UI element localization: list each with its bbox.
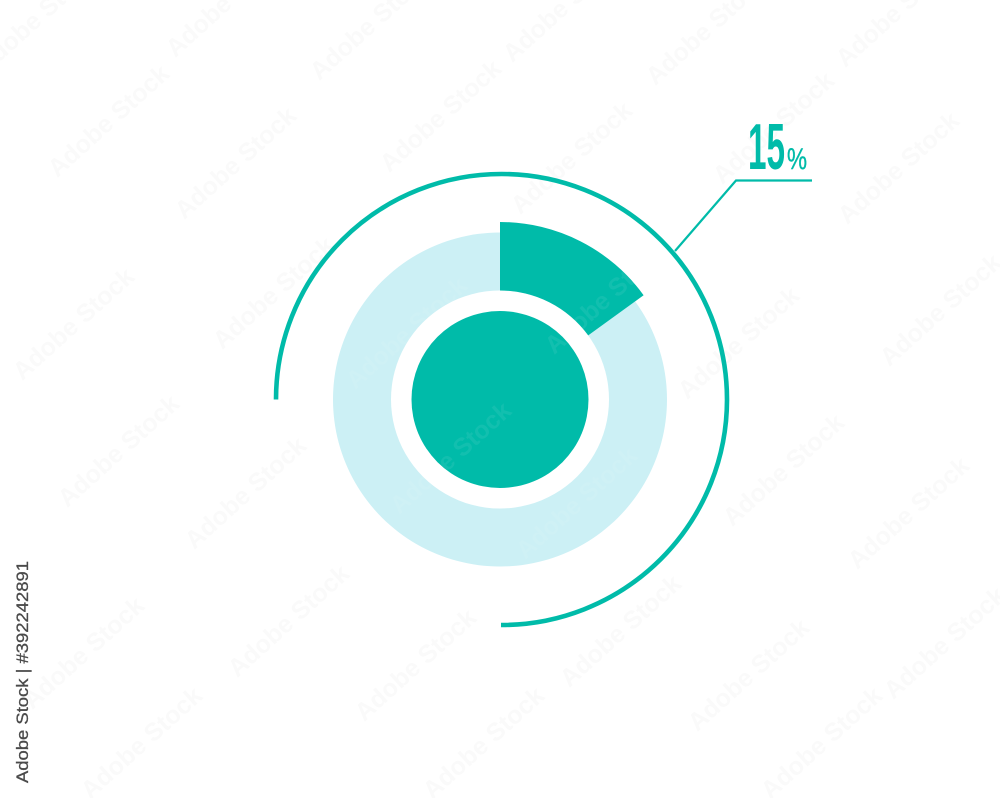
background watermark pattern: Adobe Stock: [375, 54, 507, 178]
center circle: [412, 311, 588, 488]
background watermark pattern: Adobe Stock: [170, 101, 302, 225]
watermark overlay on chart: Adobe Stock: [341, 271, 473, 395]
background watermark pattern: Adobe Stock: [18, 591, 150, 715]
watermark overlay on chart: Adobe Stock: [540, 236, 672, 360]
stock id side text: Adobe Stock | #392242891: [13, 561, 32, 783]
background watermark pattern: Adobe Stock: [8, 262, 140, 386]
background watermark pattern: Adobe Stock: [683, 613, 815, 737]
background watermark pattern: Adobe Stock: [350, 603, 482, 727]
outer progress arc: [276, 174, 727, 625]
background watermark pattern: Adobe Stock: [833, 106, 965, 230]
background watermark pattern: Adobe Stock: [673, 281, 805, 405]
background watermark pattern: Adobe Stock: [208, 231, 340, 355]
background watermark pattern: Adobe Stock: [718, 408, 850, 532]
watermark overlay on chart: [341, 236, 672, 565]
background watermark pattern: Adobe Stock: [180, 431, 312, 555]
background watermark pattern: Adobe Stock: [506, 96, 638, 220]
value label 15%: %: [787, 143, 807, 176]
light background ring: [333, 232, 667, 566]
background watermark pattern: Adobe Stock: [708, 66, 840, 190]
background watermark pattern: Adobe Stock: [223, 559, 355, 683]
background watermark pattern: Adobe Stock: [555, 569, 687, 693]
background watermark pattern: Adobe Stock: [843, 451, 975, 575]
watermark overlay on chart: Adobe Stock: [511, 441, 643, 565]
15 percent wedge: [500, 222, 644, 335]
watermark overlay on chart: Adobe Stock: [385, 396, 517, 520]
value label 15%: 15: [748, 110, 785, 183]
background watermark pattern: Adobe Stock: [43, 59, 175, 183]
leader line: [675, 180, 812, 251]
background watermark pattern: Adobe Stock: [53, 389, 185, 513]
